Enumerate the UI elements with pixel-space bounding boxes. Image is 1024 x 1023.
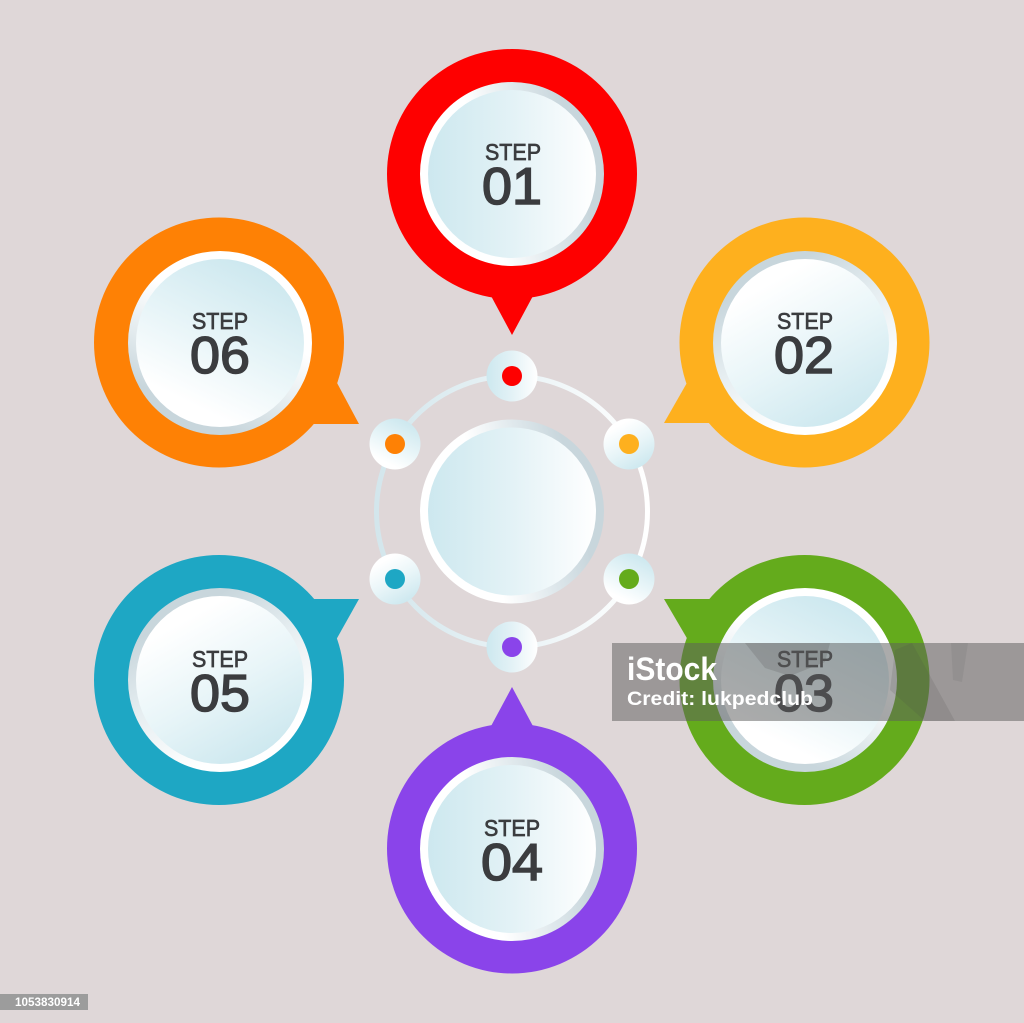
watermark credit text: Credit: lukpedclub (627, 689, 813, 710)
panel: step 01 (387, 49, 637, 335)
node: step 05 teal (370, 554, 420, 604)
step 05 disc (128, 588, 312, 772)
step 03 label: 03 (774, 665, 834, 723)
step 01 label: STEP (485, 139, 541, 165)
node: step 03 green (604, 554, 654, 604)
panel: step 02 (664, 218, 930, 468)
watermark banner (612, 643, 1024, 721)
image id tag: 1053830914 (15, 997, 81, 1009)
step 04 disc (420, 757, 604, 941)
node: step 06 orange (370, 418, 420, 470)
teal pin body (94, 555, 359, 805)
panel: step 05 (94, 555, 359, 805)
orange pin body (94, 218, 359, 468)
step 06 label: 06 (190, 327, 250, 385)
node: step 02 amber (604, 418, 654, 470)
connecting ring (376, 376, 648, 647)
amber pin body (664, 218, 930, 468)
panel: step 03 (664, 555, 930, 805)
step 05 label: 05 (190, 665, 250, 723)
center disc (420, 420, 604, 604)
purple pin body (387, 687, 637, 974)
panel: step 04 (387, 687, 637, 974)
step 01 disc (420, 82, 604, 266)
step 04 label: STEP (484, 815, 540, 841)
green pin body (664, 555, 930, 805)
step 02 label: STEP (777, 308, 833, 334)
node: step 01 red (486, 350, 538, 402)
step 01 label: 01 (482, 158, 542, 216)
step 06 label: STEP (192, 308, 248, 334)
panel: step 06 (94, 218, 359, 468)
step 03 label: STEP (777, 646, 833, 672)
step 04 label: 04 (481, 834, 543, 892)
step 02 disc (713, 251, 897, 435)
step 02 label: 02 (774, 327, 834, 385)
step 06 disc (128, 251, 312, 435)
red pin body (387, 49, 637, 335)
panel: central hub (370, 350, 654, 672)
image id tag (0, 994, 88, 1010)
step 03 disc (713, 588, 897, 772)
watermark logo text: iStock (627, 651, 717, 687)
node: step 04 purple (486, 622, 538, 672)
step 05 label: STEP (192, 646, 248, 672)
